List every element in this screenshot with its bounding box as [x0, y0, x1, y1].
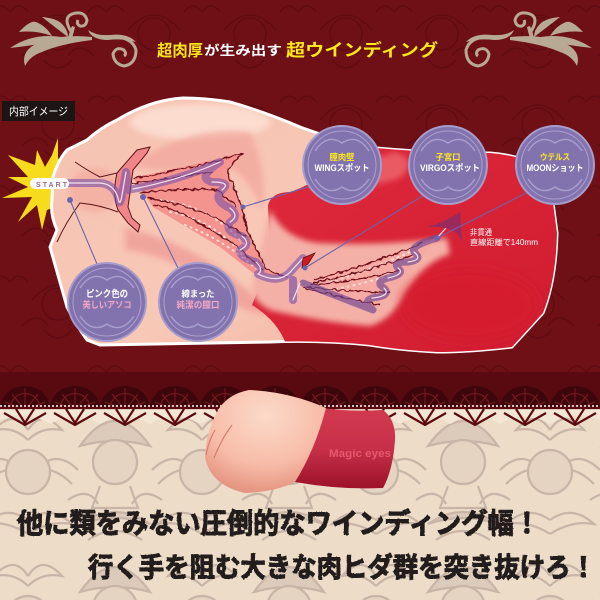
lace border [0, 372, 600, 427]
ruffled ribs [133, 153, 423, 305]
callout: entrance: 純潔の膣口 [176, 299, 220, 310]
callout: WING: WINGスポット [314, 163, 370, 173]
dark red blob right [402, 269, 538, 341]
red core region [252, 148, 557, 352]
fold line [206, 425, 232, 458]
soft pink around the entrance [69, 168, 121, 212]
callout: MOON: ウテルス [540, 152, 570, 162]
soft upper highlight [130, 104, 270, 140]
channel pink fill with rib texture [133, 153, 287, 277]
deep tip arrow [427, 212, 462, 243]
shaded and red regions clipped to the body [69, 104, 570, 360]
soft shadow below the channel [122, 228, 266, 316]
headline text [17, 507, 596, 583]
pink lobe [205, 390, 326, 493]
callout: WING: 膣肉壁 [330, 152, 355, 162]
callout: pink [68, 263, 146, 341]
beige patterned background [0, 405, 600, 600]
pale band surrounding the lower channel [252, 210, 450, 326]
label: interior image [2, 101, 75, 121]
title [157, 40, 438, 60]
ornament: left flourish [10, 13, 136, 66]
headline text: 他に類をみない圧倒的なワインディング幅！ [17, 507, 540, 539]
label: START: START [36, 182, 68, 189]
soft shadow above the channel [130, 131, 264, 210]
callout: pink: ピンク色の [86, 288, 128, 300]
note: length: 直線距離で140mm [470, 237, 538, 247]
callout: MOON: MOONショット [526, 163, 584, 173]
entrance fold lines [57, 162, 118, 242]
callout: WING [303, 126, 381, 204]
callout: pink: 美しいアソコ [82, 299, 132, 310]
dark red patterned background [0, 0, 600, 410]
ornament: right flourish [466, 13, 592, 66]
pink gloss on the upper red [376, 150, 408, 186]
callout: MOON [516, 126, 594, 204]
title: 超ウインディング [286, 40, 438, 60]
callout: entrance [159, 263, 237, 341]
callout: VIRGO [409, 126, 487, 204]
note: length: 非貫通 [470, 227, 492, 237]
icon: yellow starburst [2, 138, 62, 230]
red sleeve [295, 408, 395, 488]
cross-section body [50, 98, 570, 360]
white ribbed dots [160, 200, 410, 290]
purple guide channel [68, 162, 455, 310]
callout: VIRGO: VIRGOスポット [420, 163, 480, 173]
brand mark: Magic eyes [329, 448, 391, 460]
label: interior image: 内部イメージ [9, 104, 68, 118]
label: START [30, 178, 69, 189]
callout: entrance: 締まった [182, 288, 214, 299]
product photo [205, 390, 395, 493]
small red tip [302, 253, 315, 268]
body outline and pink base [50, 98, 557, 352]
note: length [470, 227, 538, 247]
title: 超肉厚 [157, 42, 203, 60]
title: が生み出す [204, 43, 282, 58]
callout: VIRGO: 子宮口 [436, 152, 460, 162]
leader lines [68, 187, 530, 270]
entrance fold lobes [115, 147, 150, 232]
